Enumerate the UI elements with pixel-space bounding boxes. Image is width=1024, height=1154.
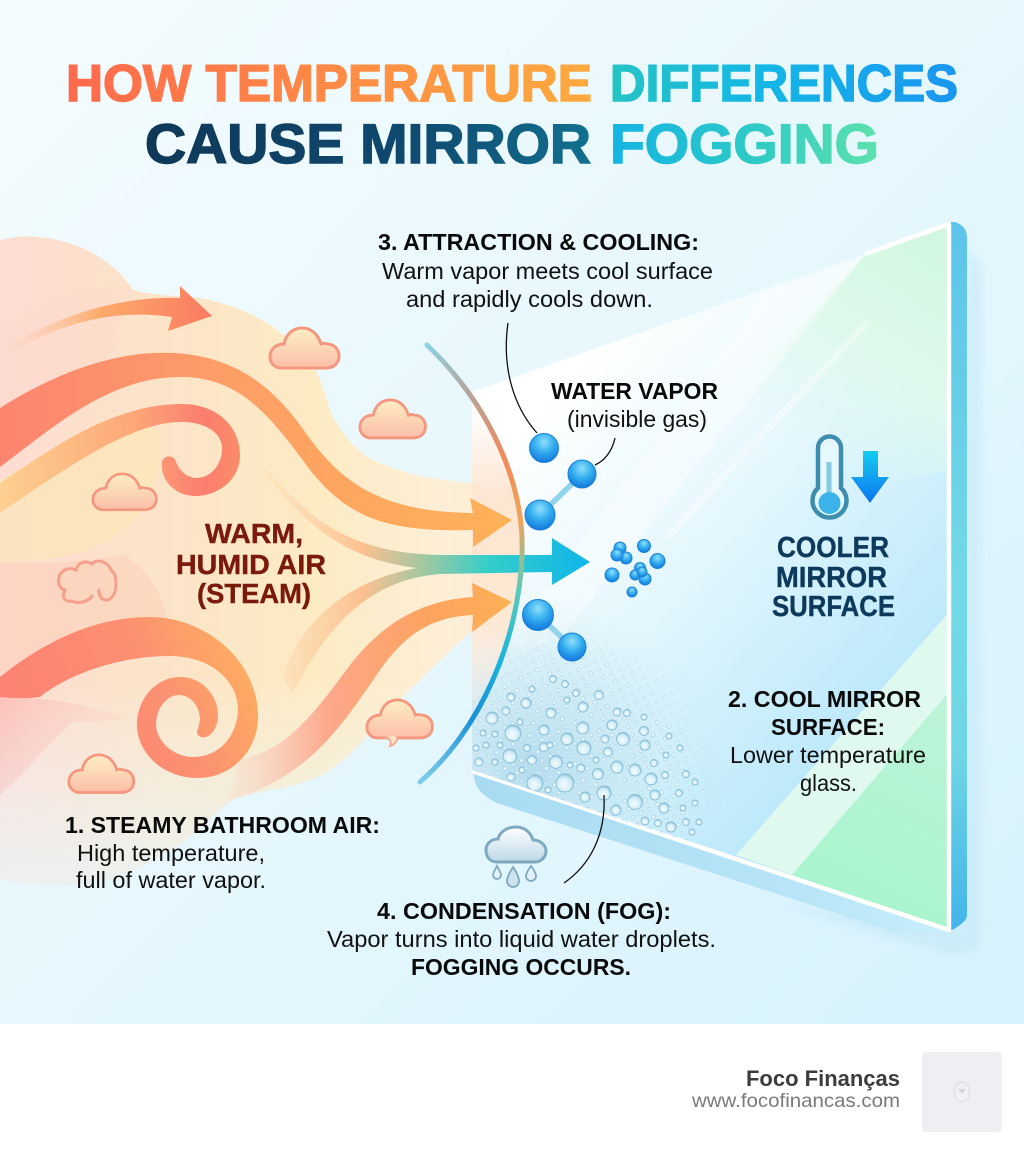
title: HOW TEMPERATURE [66,55,592,113]
label: cooler mirror surface: MIRROR [776,562,887,594]
step 1: steamy bathroom air [65,812,380,893]
arrow: upper warm air flow [0,353,512,547]
step 3: attraction and cooling: Warm vapor meets cool surface [382,258,713,284]
label: water vapor: WATER VAPOR [551,378,718,404]
step 1: steamy bathroom air: 1. STEAMY BATHROOM AIR: [65,812,380,838]
cloud icon 2 [360,400,425,438]
step 1: steamy bathroom air: full of water vapor. [76,867,266,893]
mirror [472,222,981,955]
footer logo placeholder [922,1052,1002,1132]
step 2: cool mirror surface: SURFACE: [771,714,885,740]
title [66,55,958,175]
cloud icon 5 [367,700,432,746]
mirror side bar [949,222,967,930]
title: CAUSE MIRROR [145,112,591,175]
step 3: attraction and cooling: 3. ATTRACTION & COOLING: [378,229,699,255]
label: warm humid air [176,518,326,609]
footer brand: Foco Finanças [746,1066,900,1091]
footer band [0,1024,1024,1154]
step 2: cool mirror surface: glass. [800,770,857,796]
leader line to water vapor [595,438,615,465]
leader line to condensation [564,795,604,883]
curved interface line [420,345,522,782]
title: FOGGING [610,112,879,175]
label: warm humid air: HUMID AIR [176,549,326,580]
mirror drop shadow [780,250,981,955]
step 3: attraction and cooling: and rapidly cools down. [406,286,653,312]
label: cooler mirror surface: SURFACE [772,591,895,623]
label: water vapor [551,378,718,432]
swirl: lower curl [0,617,258,778]
leader line to attraction [506,323,537,433]
footer brand [691,1066,900,1112]
water vapor molecules [522,434,596,661]
warm vapor strip on mirror edge [472,400,521,720]
title: DIFFERENCES [610,55,958,113]
arrow: central flow from steam into mirror [265,467,590,693]
label: cooler mirror surface [772,532,895,623]
small vapor cluster [605,540,665,597]
cloud icon 6 [69,755,134,792]
step 4: condensation: Vapor turns into liquid water droplets. [327,926,716,952]
cloud icon 4: outline puff [59,561,116,602]
step 2: cool mirror surface [728,686,926,796]
cloud icon 3 [93,474,156,510]
arrow: top warm air [10,286,212,352]
icon: down arrow [851,451,889,503]
icon: rain cloud [486,827,546,887]
step 4: condensation: 4. CONDENSATION (FOG): [377,898,671,924]
arrow: lower warm air flow [227,583,512,800]
icon: thermometer [813,437,846,518]
step 4: condensation: FOGGING OCCURS. [411,954,631,980]
mirror glass [472,224,949,930]
footer brand: www.focofinancas.com [691,1090,900,1112]
swirl: upper curl [0,404,240,513]
step 2: cool mirror surface: Lower temperature [730,742,926,768]
step 3: attraction and cooling [378,229,713,312]
label: warm humid air: (STEAM) [197,578,311,609]
steam cloud mass [0,236,525,886]
label: cooler mirror surface: COOLER [777,532,889,564]
step 4: condensation [327,898,716,980]
cloud icon 1 [270,328,339,368]
mirror lower edge thickness [472,770,952,934]
mirror white frame [472,224,949,930]
step 1: steamy bathroom air: High temperature, [77,840,265,866]
step 2: cool mirror surface: 2. COOL MIRROR [728,686,921,712]
label: water vapor: (invisible gas) [567,406,707,432]
label: warm humid air: WARM, [205,518,303,549]
fog droplets on mirror [472,622,713,846]
